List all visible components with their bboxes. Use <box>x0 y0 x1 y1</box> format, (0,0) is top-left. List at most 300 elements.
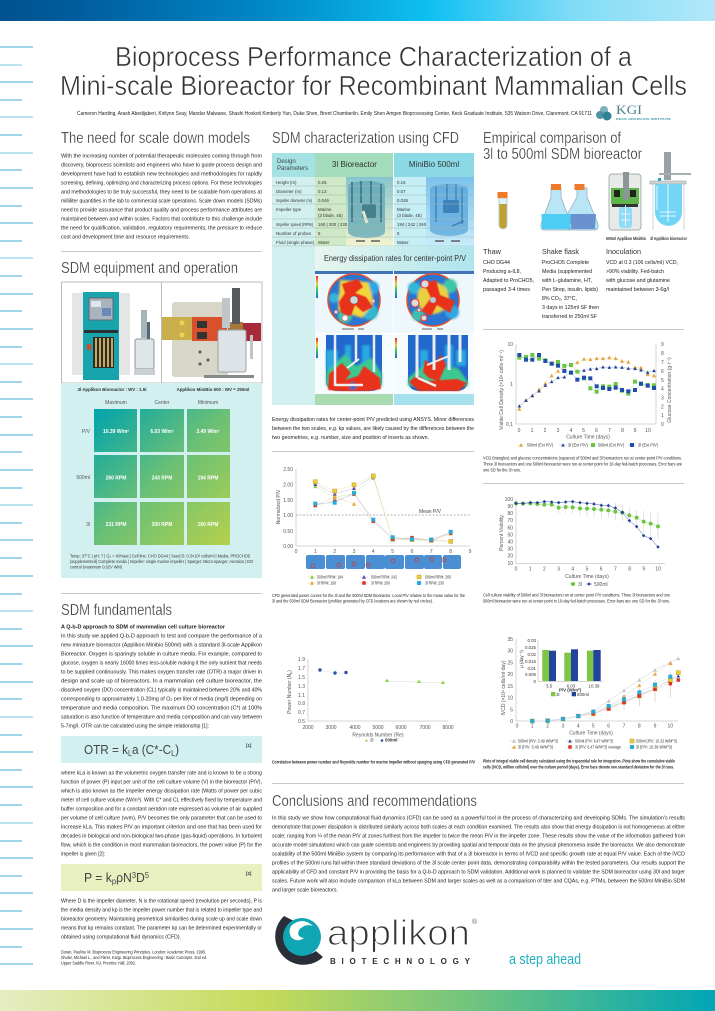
text block: power per volume: flow, which is the condition in most mammalian bioreactors, the power value (P) for the <box>61 842 262 848</box>
chart: normalized P/V line chart: 9 <box>469 549 472 555</box>
chart: VCD and glucose: 4 <box>661 386 664 392</box>
chart: power number vs Reynolds number: 1.9 <box>298 657 305 663</box>
chart: power number vs Reynolds number: Reynolds Number (Re) <box>352 732 404 738</box>
legend: 500ml RPM: 242 <box>371 574 397 580</box>
logo: applikon biotechnology: applikon <box>327 912 470 953</box>
callout: power equation: [2] <box>246 871 252 876</box>
text block: the need for qualification, validation, regulatory requirements, the pressure to reduce <box>61 226 262 232</box>
text block: impeller: bioreactor geometry. Maintaining geometrical similarities during scale up and scale down <box>61 916 262 922</box>
text block: inoculation: VCD at 0.3 (106 cells/ml) VCD, <box>606 260 678 266</box>
table: design parameters: 0.026 <box>397 198 409 203</box>
chart: percent viability: Percent Viability <box>499 515 505 551</box>
caption: between the two scales, e.g. kp values, are likely caused by the differences between the <box>272 426 474 432</box>
text block: shake flask: Shake flask <box>542 247 579 256</box>
caption: Cell culture viability of 500ml and 3l bioreactors run at center point P/V conditions. Three 3l bioreactors and one <box>483 592 670 598</box>
illustration: 3l vessel render <box>348 181 385 241</box>
top gradient bar <box>0 0 715 21</box>
chart: VCD and glucose: 2 <box>544 428 547 434</box>
panel: operating conditions grid: 260 RPM <box>106 476 126 482</box>
inset bar chart: specific growth rate: 0 <box>534 679 537 684</box>
chart: percent viability: 90 <box>507 504 513 510</box>
callout: OTR equation: a (C*-C <box>132 742 171 757</box>
chart: IVCD: Culture Time (days) <box>569 730 613 736</box>
chart: percent viability: 7 <box>614 566 617 572</box>
table: design parameters: 160 | 200 | 230 <box>318 222 348 227</box>
caption: VCD (triangles) and glucose concentrations (squares) of 500ml and 3l bioreactors run at center-point P/V conditions. <box>483 456 682 460</box>
chart: normalized P/V line chart: 5 <box>391 549 394 555</box>
legend: 3l <box>578 582 582 588</box>
text block: cost and development time and resource requirements. <box>61 234 190 240</box>
callout: power equation: P = k <box>84 870 114 885</box>
icon: MiniBio bioreactor <box>609 172 641 230</box>
chart: IVCD: 35 <box>507 637 513 643</box>
callout: power equation <box>61 864 262 891</box>
legend: 3l (P/V: 3.49 W/M^3) <box>518 744 553 750</box>
inset bar chart: specific growth rate: 3.5 <box>546 684 553 688</box>
text block: power per volume: per volume of cell culture (vvm), P/V becomes the only parameter that can be used to <box>61 816 262 822</box>
text block: thaw <box>483 247 534 293</box>
legend: 3l (P/V: 6.47 W/M^3) Average <box>575 744 621 750</box>
chart: percent viability: 9 <box>642 566 645 572</box>
text block: thaw: Thaw <box>483 247 502 256</box>
text block: power per volume: which is also known as the impeller energy dissipation rate (Watts of power per cubic <box>60 788 262 794</box>
text block: milliliter quantities in the lab to commercial scale operations. Scale down models (SDMs) <box>61 198 262 204</box>
chart: IVCD: 3 <box>562 724 565 730</box>
chart: power number vs Reynolds number: 1.7 <box>298 666 305 672</box>
chart: VCD and glucose: 1 <box>661 413 664 419</box>
chart: percent viability: 20 <box>507 554 513 560</box>
caption <box>483 758 675 770</box>
chart: percent viability: 6 <box>600 566 603 572</box>
text block: power per volume: buffer composition and for a constant aeration rate expressed as volume of air supplied <box>61 806 262 812</box>
chart: IVCD: 2 <box>546 724 549 730</box>
chart: IVCD: 15 <box>507 684 513 690</box>
table: design parameters: Height (m) <box>276 180 297 185</box>
text block: maintained between and within scales. Factors that contribute to this challenge include <box>61 216 262 222</box>
chart: percent viability: 60 <box>507 526 513 532</box>
panel: operating conditions grid: (supplemented) Complete media | Impeller: single marine impeller | Sparger: Micro-sparger; Aeration | DO <box>70 559 254 564</box>
chart: VCD and glucose: 6 <box>661 369 664 375</box>
legend: 500ml <box>594 582 608 588</box>
table: design parameters: Fluid (single phase) <box>276 240 315 245</box>
logo: applikon biotechnology: BIOTECHNOLOGY <box>330 957 471 966</box>
inset bar chart: specific growth rate: 10.39 <box>588 684 600 688</box>
chart: percent viability: 4 <box>571 566 574 572</box>
chart: normalized P/V line chart <box>272 467 472 604</box>
caption: Correlation between power number and Reynolds number for marine impeller without sparging using CFD generated P/V <box>272 760 475 764</box>
chart: IVCD: 8 <box>638 724 641 730</box>
chart: VCD and glucose: 1 <box>531 428 534 434</box>
icon: shake flasks <box>541 184 598 230</box>
text block: applicability of CFD and constant P/V in providing the basis for a Q-b-D approach to SDM validation. Additional work is planned to validate the SDM bioreactor using 30l and larger <box>272 870 685 876</box>
inset bar chart: specific growth rate: 500ml <box>577 692 589 697</box>
chart: percent viability: 50 <box>507 532 513 538</box>
chart: VCD and glucose: 6 <box>595 428 598 434</box>
table: design parameters: 3l Bioreactor <box>332 160 377 169</box>
table: design parameters: 0.15 <box>397 180 406 185</box>
chart: normalized P/V line chart: 2.50 <box>283 467 293 473</box>
chart: IVCD: 6 <box>607 724 610 730</box>
callout: OTR equation: L <box>171 749 176 758</box>
table: design parameters: 194 | 242 | 260 <box>397 222 427 227</box>
text block: impeller: the media density and kp is the impeller power number that is related to impeller type and <box>61 908 262 914</box>
chart: IVCD: 4 <box>577 724 580 730</box>
title: Bioprocess Performance Characterization of a <box>115 41 633 72</box>
heading <box>483 130 642 163</box>
legend <box>510 738 677 750</box>
panel: operating conditions grid: Temp: 37°C | pH: 7 | O₂ = 40%sat | Cell line: CHO DG44 | Seed D: 0.3×10⁶ cells/ml | Media: PROCHO5 <box>70 554 250 558</box>
text block: inoculation: maintained between 3-6g/l <box>606 287 669 293</box>
table: design parameters: (3 blade, 45) <box>318 213 343 218</box>
chart: power number vs Reynolds number: 0.9 <box>298 701 305 707</box>
icon: applikon mark <box>275 916 323 965</box>
chart: percent viability: 2 <box>543 566 546 572</box>
table: design parameters: (3 blade, 45) <box>397 213 422 218</box>
chart: normalized P/V line chart: 7 <box>430 549 433 555</box>
text block: introduction: design and scale up of bioreactors. In a mammalian cell culture bioreactor, the <box>61 678 262 684</box>
caption <box>272 417 474 441</box>
text block: shake flask <box>541 247 599 320</box>
tagline: a step ahead <box>509 952 581 968</box>
authors: Cameron Harding, Arash Abedijaberi, Kirilynn Svay, Mandar Malwane, Shashi Hoskoti Kimberly Yan, Duke Shen, Brent Chamberlin, Emily Shen Amgen Bioprocessing Center, Keck Graduate Institute, 535 Watson Drive, Claremont, CA 91711 <box>77 111 592 117</box>
text block: profiles of the 500ml runs fall within three standard deviations of the 3l scale center point data, demonstrating comparability within the tested parameters. Our results support the <box>272 860 685 866</box>
references: Doran, Pauline M. Bioprocess Engineering Principles. London: Academic Press, 1995. <box>61 950 206 954</box>
title <box>60 41 687 101</box>
chart: normalized P/V line chart: 4 <box>372 549 375 555</box>
text block: impeller: means that kp remains constant. The parameter kp can be determined experimentally or <box>61 926 262 932</box>
caption: Three 3l bioreactors and one 500ml bioreactor were run at center point for 10-day fed-batch processes. Error bars are <box>483 462 682 466</box>
callout: power equation: ρN <box>116 870 132 885</box>
chart: percent viability: 10 <box>655 566 661 572</box>
text block: thaw: Producing a-IL8, <box>483 269 521 275</box>
callout: OTR equation: L <box>128 749 132 758</box>
chart: power number vs Reynolds number: 1.5 <box>298 675 305 681</box>
table: design parameters: Parameters <box>277 166 308 172</box>
callout: OTR equation: ) <box>175 742 179 757</box>
table: design parameters: 5 <box>397 231 400 236</box>
panel: SDM characterization using CFD <box>272 130 474 441</box>
caption: 500ml bioreactor were run at center point in 10-day fed-batch processes. Error bars are one SD for the 3l runs. <box>483 598 670 604</box>
chart: normalized P/V line chart: 1 <box>314 549 317 555</box>
panel: SDM equipment and operation <box>61 260 262 578</box>
chart: power number vs Reynolds number: 2000 <box>302 725 314 731</box>
chart: VCD and glucose: Culture Time (days) <box>566 434 610 440</box>
chart: normalized P/V line chart: 1.00 <box>283 513 293 519</box>
panel: operating conditions grid: 160 RPM <box>198 522 218 528</box>
text block: power per volume: increase kLa. This makes P/V an important criterion and one that has been used for <box>61 824 262 830</box>
panel: operating conditions grid: P/V <box>82 429 91 435</box>
text block: introduction: saturation is also function of temperature and media composition and can vary between <box>61 714 262 720</box>
photo: 3l bioreactor system <box>62 282 162 383</box>
legend: 3l RPM: 200 <box>371 580 390 586</box>
heading: Conclusions and recommendations <box>272 793 477 810</box>
text block <box>61 154 262 240</box>
panel: operating conditions grid: Minimum <box>198 400 218 406</box>
chart: VCD and glucose: 10 <box>645 428 651 434</box>
chart: percent viability <box>483 497 670 604</box>
chart: VCD and glucose: 7 <box>608 428 611 434</box>
chart: power number vs Reynolds number: 6000 <box>395 725 407 731</box>
chart: VCD and glucose: Viable Cell Density (×10⁶ cells·ml⁻¹) <box>499 350 505 430</box>
legend: 3l RPM: 230 <box>425 580 444 586</box>
chart: IVCD: 5 <box>510 708 513 714</box>
chart: percent viability: 40 <box>507 540 513 546</box>
panel: operating conditions grid: 200 RPM <box>152 522 172 528</box>
caption: CFD generated power curves for the 3l and the 500ml SDM Bioreactor. Local P/V relative to the mean value for the <box>272 593 465 598</box>
chart: percent viability: 10 <box>507 561 513 567</box>
table: design parameters: 0.13 <box>318 189 327 194</box>
table: design parameters: 0.25 <box>318 180 327 185</box>
text block: introduction: to be supplied continuously. This makes oxygen transfer rate (OTR) a major driver in <box>61 670 262 676</box>
chart: percent viability: 8 <box>628 566 631 572</box>
chart: power number vs Reynolds number: 1.3 <box>298 684 305 690</box>
chart: normalized P/V line chart: 8 <box>449 549 452 555</box>
table: design parameters: Impeller speed (RPM) <box>276 222 313 227</box>
legend: 3l (P/V: 10.39 W/M^3) <box>636 744 672 750</box>
chart: IVCD: 5 <box>592 724 595 730</box>
chart: percent viability: 5 <box>586 566 589 572</box>
heading: SDM fundamentals <box>61 602 172 619</box>
inset bar chart: specific growth rate <box>519 638 606 698</box>
panel: SDM fundamentals <box>60 602 263 966</box>
chart: percent viability: 1 <box>529 566 532 572</box>
chart: power number vs Reynolds number: 0.5 <box>298 719 305 725</box>
icon: thaw tube <box>498 192 508 229</box>
panel: need for scale down models <box>61 130 262 240</box>
heading: 3l to 500ml SDM bioreactor <box>483 146 642 163</box>
chart: CFD top view 500ml <box>394 271 474 333</box>
inset bar chart: specific growth rate: 6.03 <box>567 684 576 688</box>
chart: power number vs Reynolds number: ) <box>287 670 293 672</box>
chart: percent viability: 3 <box>557 566 560 572</box>
chart: power number vs Reynolds number: 500ml <box>385 738 397 742</box>
table: design parameters: Number of probes <box>276 231 312 236</box>
panel: operating conditions grid: 243 RPM <box>152 476 172 482</box>
chart: VCD and glucose: 9 <box>634 428 637 434</box>
chart: VCD and glucose: 5 <box>661 378 664 384</box>
text block: impeller: obtained using computational fluid dynamics (CFD). <box>61 934 181 940</box>
panel: conclusions and recommendations <box>272 793 685 968</box>
chart: VCD and glucose: 1 <box>510 382 513 388</box>
text block: demonstrate that power dissipation is distributed similarly across both scales at each condition examined. The results also show that energy dissipation is not homogeneous at either <box>272 824 685 830</box>
table: design parameters: 5 <box>318 231 321 236</box>
chart: IVCD <box>483 637 678 770</box>
caption: one SD for the 3l runs. <box>483 468 521 472</box>
heading: SDM characterization using CFD <box>272 130 459 147</box>
text block: introduction: dissolved oxygen (DO) concentration (CL) typically is maintained between 20% and 40% <box>61 688 262 694</box>
chart: normalized P/V line chart: 1.50 <box>283 498 293 504</box>
text block: power per volume: where kLa is known as the volumetric oxygen transfer rate and is known to be a strong <box>60 770 262 776</box>
table: design parameters <box>272 153 474 405</box>
text block: inoculation <box>605 247 678 293</box>
panel: operating conditions grid: control (maximum 0.02V WM) <box>70 564 122 570</box>
text block: introduction <box>61 634 263 730</box>
chart: normalized P/V line chart: Normalized P/V <box>276 489 282 524</box>
text block: screening, defining, optimizing and characterizing process options. For these technologies <box>61 180 262 186</box>
chart: VCD and glucose: 3 <box>557 428 560 434</box>
table: design parameters: Marine <box>318 207 332 212</box>
chart: power number vs Reynolds number: 0.7 <box>298 710 305 716</box>
callout: power equation: D <box>136 870 145 885</box>
chart: VCD and glucose: Glucose Concentration (g·l⁻¹) <box>667 357 673 423</box>
chart: normalized P/V line chart: Mean P/V <box>419 509 442 515</box>
caption: Energy dissipation rates for center-point P/V predicted using ANSYS. Minor differences <box>272 417 474 423</box>
probe location thumbnails <box>306 555 461 569</box>
references: Upper Saddle River, NJ: Prentice Hall, 2002. <box>61 960 136 966</box>
chart: percent viability: 0 <box>515 566 518 572</box>
chart: VCD and glucose: 0 <box>661 422 664 428</box>
text block: shake flask: ProCHO5 Complete <box>542 260 589 266</box>
chart: VCD and glucose: 2 <box>661 404 664 410</box>
table: design parameters: Diameter (m) <box>276 189 302 194</box>
panel: operating conditions grid: 194 RPM <box>198 476 218 482</box>
chart: percent viability: 70 <box>507 518 513 524</box>
text block: thaw: passaged 3-4 times <box>483 287 530 293</box>
panel: operating conditions grid: 6.03 W/m² <box>150 429 174 435</box>
legend: 500ml (P/V: 10.32 W/M^3) <box>636 738 677 744</box>
chart: percent viability: 100 <box>505 497 513 503</box>
chart: VCD and glucose: 5 <box>582 428 585 434</box>
chart: power number vs Reynolds number: 8000 <box>442 725 454 731</box>
legend: 500ml RPM: 194 <box>317 574 343 580</box>
legend: 500ml (P/V: 6.47 W/M^3) <box>575 738 613 744</box>
table: design parameters: Energy dissipation rates for center-point P/V <box>324 253 466 263</box>
chart: VCD and glucose: 8 <box>621 428 624 434</box>
panel: operating conditions grid: 231 RPM <box>106 522 126 528</box>
text block <box>272 816 685 894</box>
chart: power number vs Reynolds number: Power Number (N <box>287 674 293 714</box>
caption: 3l and the 500ml SDM Bioreactor (profiles generated by CFD locations are shown by red circles). <box>272 598 433 604</box>
chart: power number vs Reynolds number: 1.1 <box>298 693 305 699</box>
chart: VCD and glucose: 9 <box>661 342 664 348</box>
text block: development have had to establish new technologies and methodologies for rapidly <box>61 172 262 178</box>
bottom gradient bar <box>0 990 715 1011</box>
text block: power per volume: impeller is given [2]: <box>61 852 105 858</box>
logo: applikon biotechnology <box>275 912 478 966</box>
references <box>61 950 207 966</box>
text block: power per volume: function of power (P) input per unit of the cell culture volume (V) in the bioreactor (P/V), <box>61 780 262 786</box>
text block: shake flask: transferred to 250ml SF <box>542 314 598 320</box>
icon: KGI logo: KGI <box>616 103 642 117</box>
text block: introduction: new miniature bioreactor (Applikon Minibio 500ml) with a standard 3l-scale Applikon <box>61 642 262 648</box>
callout: OTR equation: OTR = k <box>84 742 133 757</box>
text block: With the increasing number of potential therapeutic molecules coming through from <box>61 154 262 160</box>
caption <box>483 456 682 472</box>
table: design parameters: 0.046 <box>318 198 330 203</box>
panel: operating conditions grid: Center <box>154 400 170 406</box>
text block: accurate model simulations which can guide scientists and engineers by providing spatial and temporal data on the physical phenomena inside the bioreactor. We also demonstrate <box>272 842 685 848</box>
caption <box>483 592 670 604</box>
chart: power number vs Reynolds number: 3000 <box>325 725 337 731</box>
text block: scalability of the 500ml MiniBio system by comparing its performance with that of a 3l bioreactor in terms of IVCD and specific growth rate at equal P/V value. Each of the IVCD <box>272 852 685 858</box>
chart: IVCD: 25 <box>507 660 513 666</box>
text block: shake flask: Pen Strep, insulin, lipids) <box>542 287 598 293</box>
text block: introduction: In this study we applied Q-b-D approach to test and compare the performance of a <box>61 634 263 640</box>
chart: normalized P/V line chart: 3 <box>353 549 356 555</box>
legend: 500ml (P/V: 3.49 W/M^3) <box>518 738 558 744</box>
text block: inoculation: Inoculation <box>606 247 641 256</box>
text block: shake flask: 8% CO₂, 37°C, <box>542 296 577 302</box>
chart: power number vs Reynolds number <box>272 657 475 764</box>
chart: VCD and glucose: 0 <box>518 428 521 434</box>
chart: power number vs Reynolds number: 7000 <box>419 725 431 731</box>
text block: shake flask: 3 days in 125ml SF then <box>542 305 599 311</box>
chart: power number vs Reynolds number: p <box>289 672 293 674</box>
text block: introduction: glucose, oxygen is nearly 16000 times less-soluble making it the only nutrient that needs <box>61 660 262 666</box>
inset bar chart: specific growth rate: 0.015 <box>525 659 537 664</box>
text block: shake flask: Media (supplemented <box>542 269 592 275</box>
legend: 3l (Ext P/V) <box>638 442 658 448</box>
references: Shuler, Michael L., and Fikret, Kargi. Bioprocess Engineering : Basic Concepts. 2nd ed. <box>61 955 207 960</box>
text block: need to provide assurance that product quality and process performance attributes are <box>61 208 262 214</box>
inset bar chart: specific growth rate: µ (day⁻¹) <box>519 650 524 668</box>
table: design parameters: Impeller type <box>276 207 302 212</box>
table: design parameters: 0.07 <box>397 189 406 194</box>
table: design parameters: Design <box>277 159 296 165</box>
table: design parameters: Marine <box>397 207 411 212</box>
callout: power equation: 3 <box>132 871 137 880</box>
chart: IVCD: 20 <box>507 672 513 678</box>
chart: VCD and glucose: 8 <box>661 351 664 357</box>
subheading: A Q-b-D approach to SDM of mammalian cell culture bioreactor <box>61 624 226 630</box>
text block: inoculation: >90% viability. Fed-batch <box>606 269 664 275</box>
text block: scale; ranging from ¼ of the mean P/V at zones furthest from the impeller to twice the mean P/V in the impeller zone. These results show the value of the information gathered from <box>272 834 685 840</box>
photo: MiniBio system <box>162 282 262 383</box>
chart: power number vs Reynolds number: 4000 <box>349 725 361 731</box>
text block: thaw: Adapted to ProCHO5, <box>483 278 534 284</box>
chart: VCD and glucose: 10 <box>507 342 513 348</box>
inset bar chart: specific growth rate: 3l <box>556 692 559 697</box>
heading: SDM equipment and operation <box>61 260 238 277</box>
legend: 500ml (Ext P/V) <box>527 442 553 448</box>
chart: IVCD: 10 <box>668 724 673 730</box>
text block: In this study we show how computational fluid dynamics (CFD) can be used as a powerful tool in the process of characterizing and developing SDMs. The simulation's results <box>272 816 685 822</box>
chart: normalized P/V line chart: 0.50 <box>283 529 293 535</box>
callout: power equation: p <box>112 877 117 886</box>
text block: introduction: temperature and media composition. The maximum DO concentration (C*) at 100% <box>61 706 262 712</box>
table: design parameters: Water <box>397 240 409 245</box>
text block: impeller <box>61 898 262 940</box>
legend: 3l (Ext P/V) <box>568 442 588 448</box>
panel: operating conditions grid: 3.49 W/m² <box>196 429 220 435</box>
illustration: 500ml vessel render <box>430 184 468 241</box>
icon: KGI logo: KECK GRADUATE INSTITUTE <box>616 117 671 121</box>
legend <box>308 574 451 586</box>
chart: IVCD: 0 <box>510 719 513 725</box>
panel: operating conditions grid: 10.39 W/m² <box>103 429 129 435</box>
caption: two geometries, e.g. number, size and position of inserts as shown. <box>272 435 429 441</box>
callout: power equation: 5 <box>145 871 150 880</box>
chart: VCD and glucose: 0.1 <box>506 422 513 428</box>
text block: introduction: corresponding to approximately 1.0-20mg of O₂ per liter of media (mg/l) depending on <box>61 696 262 702</box>
logo: applikon biotechnology: ® <box>472 918 478 926</box>
text block: power per volume: decades in biological and non-biological two-phase (gas-liquid) operations. In turbulent <box>61 834 262 840</box>
chart: CFD side view 3l <box>315 334 393 394</box>
inset bar chart: specific growth rate: 0.01 <box>527 666 537 671</box>
inset bar chart: specific growth rate: P/V (W/m³) <box>559 688 582 692</box>
callout: OTR equation <box>61 736 262 763</box>
heading: Empirical comparison of <box>483 130 622 147</box>
chart: percent viability: 30 <box>507 546 513 552</box>
callout: OTR equation: [1] <box>246 743 252 748</box>
text block: scales. Future work will also include comparison of kLa between SDM and larger scales as well as a comparison of titer and CQAs, e.g. PTMs, between the 500ml MiniBio SDM <box>272 878 685 884</box>
table: design parameters: Water <box>318 240 330 245</box>
chart: IVCD: 7 <box>623 724 626 730</box>
text block: thaw: CHO DG44 <box>483 260 510 266</box>
chart: IVCD: 0 <box>516 724 519 730</box>
text block: impeller: Where D is the impeller diameter, N is the rotational speed (revolution per seconds), P is <box>61 898 262 904</box>
icon: KGI logo <box>596 103 671 121</box>
